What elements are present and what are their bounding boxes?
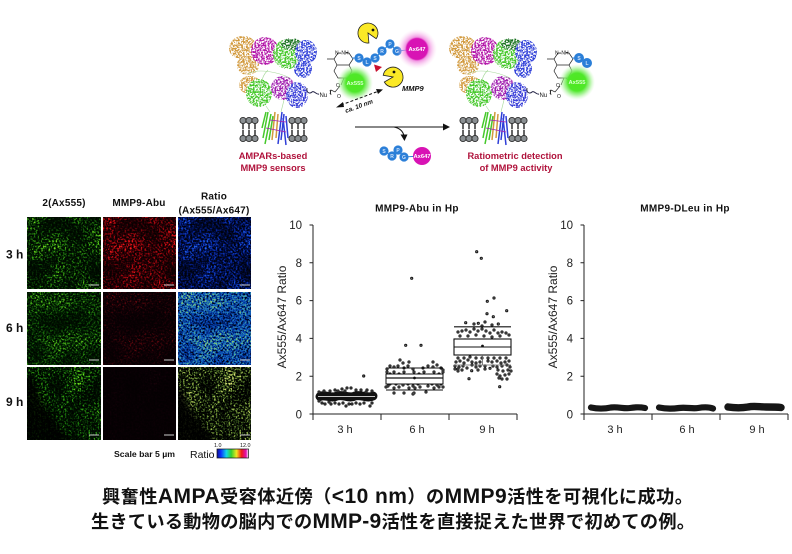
- y tick labels: [289, 220, 303, 422]
- released peptide fragment: [379, 145, 431, 165]
- chart title: MMP9-DLeu in Hp: [640, 204, 730, 214]
- label: distance: ca. 10 nm: [344, 98, 374, 115]
- conclusion text: [91, 485, 695, 533]
- x labels: 9 h: [749, 424, 765, 436]
- x labels: 9 h: [479, 424, 495, 436]
- y tick labels: 8: [567, 258, 573, 270]
- icon: Ax555 fluorophore bright: Ax555: [568, 80, 586, 86]
- y tick labels: 10: [560, 220, 573, 232]
- label: AMPARs-based MMP9 sensors: AMPARs-based: [239, 151, 308, 161]
- label: AMPARs-based MMP9 sensors: [239, 151, 308, 173]
- conclusion text: 興奮性AMPA受容体近傍（<10 nm）のMMP9活性を可視化に成功。: [102, 485, 693, 508]
- reaction arrow: [355, 124, 450, 141]
- y axis label: Ax555/Ax647 Ratio: [546, 265, 560, 368]
- x labels: [607, 424, 765, 436]
- icon: Ax555 green fluorophore: Ax555: [346, 81, 364, 87]
- y tick labels: 4: [567, 334, 574, 346]
- peptide substrate beads: P: [388, 42, 392, 48]
- legend: ratio colour bar: [190, 443, 250, 461]
- chart title: MMP9-Abu in Hp: [375, 204, 459, 214]
- x labels: 3 h: [607, 424, 623, 436]
- column headers: 2(Ax555): [42, 198, 86, 209]
- icon: MMP9 pacman top: [358, 23, 378, 43]
- y tick labels: 10: [289, 220, 302, 232]
- column headers: MMP9-Abu: [112, 198, 166, 209]
- icon: cleavage site triangle: [374, 64, 382, 72]
- released peptide fragment: P: [396, 148, 400, 154]
- label: ratiometric detection: Ratiometric detection: [467, 151, 563, 161]
- y tick labels: 6: [296, 296, 302, 308]
- y tick labels: 0: [296, 410, 302, 422]
- label: scale bar: Scale bar 5 µm: [114, 449, 175, 459]
- icon: AMPA receptor protein with lipid membrane: [229, 36, 353, 145]
- axes: [580, 225, 788, 420]
- icon: Ax647 magenta fluorophore: [397, 29, 437, 69]
- y tick labels: [560, 220, 574, 422]
- row labels: 3 h: [6, 248, 23, 262]
- released peptide fragment: Ax647: [413, 154, 431, 160]
- column headers: (Ax555/Ax647): [179, 206, 249, 216]
- conclusion text: 生きている動物の脳内でのMMP-9活性を直接捉えた世界で初めての例。: [91, 510, 695, 533]
- box: 3 h: [318, 396, 375, 398]
- label: ratiometric detection: of MMP9 activity: [480, 163, 553, 173]
- scatter points: 9 h: [455, 252, 511, 387]
- chart: MMP9-DLeu in Hp: [546, 204, 788, 436]
- icon: Ax555 fluorophore bright: [559, 64, 595, 100]
- chart: MMP9-Abu in Hp: [275, 204, 517, 436]
- legend: ratio colour bar: Ratio: [190, 449, 215, 461]
- released peptide fragment: S: [382, 149, 386, 155]
- axes: [310, 225, 517, 420]
- y tick labels: 2: [567, 372, 573, 384]
- icon: AMPA receptor after cleavage: [449, 36, 573, 145]
- released peptide fragment: R: [390, 154, 394, 160]
- row labels: 9 h: [6, 395, 23, 409]
- scatter points: 3 h: [319, 376, 373, 406]
- arrow: distance: [336, 89, 383, 108]
- y tick labels: 8: [296, 258, 302, 270]
- scatter band: 3 h: [591, 407, 645, 409]
- panel: micrographs: [6, 192, 251, 461]
- peptide substrate beads: S: [373, 56, 377, 62]
- legend: ratio colour bar: 1.0: [214, 443, 222, 449]
- scatter band: 6 h: [659, 407, 713, 409]
- box: 9 h: [454, 327, 511, 365]
- y axis label: Ax555/Ax647 Ratio: [275, 265, 289, 368]
- label: AMPARs-based MMP9 sensors: MMP9 sensors: [240, 163, 306, 173]
- x labels: 6 h: [409, 424, 425, 436]
- peptide substrate beads: R: [380, 49, 384, 55]
- peptide substrate beads: S: [357, 56, 361, 62]
- remaining beads: L: [585, 61, 589, 67]
- released peptide fragment: G: [402, 155, 406, 161]
- remaining beads: S: [577, 56, 581, 62]
- schematic: cleaved sensor, ratiometric detection: [449, 36, 595, 173]
- peptide substrate beads: L: [365, 60, 369, 66]
- dark tissue regions, 9 h ratio: [178, 385, 218, 440]
- scatter points: 6 h: [386, 278, 443, 394]
- icon: MMP9 pacman bottom: [383, 67, 403, 87]
- x labels: 6 h: [679, 424, 695, 436]
- icon: Ax555 green fluorophore: [337, 65, 373, 101]
- scatter band: 9 h: [728, 406, 781, 408]
- column headers: Ratio: [201, 192, 227, 202]
- dark tissue regions, 9 h: [27, 374, 72, 440]
- row labels: [6, 248, 23, 409]
- icon: Ax647 magenta fluorophore: Ax647: [408, 47, 426, 53]
- peptide substrate beads: G: [395, 49, 399, 55]
- scale bars: [89, 285, 250, 435]
- y tick labels: 0: [567, 410, 573, 422]
- legend: ratio colour bar: 12.0: [240, 443, 250, 449]
- peptide substrate beads: [352, 39, 408, 67]
- y tick labels: 2: [296, 372, 302, 384]
- row labels: 6 h: [6, 321, 23, 335]
- x labels: [337, 424, 495, 436]
- remaining beads: [572, 53, 592, 68]
- box: 6 h: [386, 368, 443, 390]
- schematic: AMPAR-based MMP9 sensor, before cleavage: [229, 23, 437, 173]
- image: 3 h row: [27, 217, 251, 289]
- column headers: [42, 192, 249, 216]
- label: ratiometric detection: [467, 151, 563, 173]
- x labels: 3 h: [337, 424, 353, 436]
- y tick labels: 4: [296, 334, 303, 346]
- label: MMP9: MMP9: [402, 84, 424, 93]
- y tick labels: 6: [567, 296, 573, 308]
- image: 9 h row: [27, 367, 251, 440]
- image: 6 h row: [27, 292, 251, 365]
